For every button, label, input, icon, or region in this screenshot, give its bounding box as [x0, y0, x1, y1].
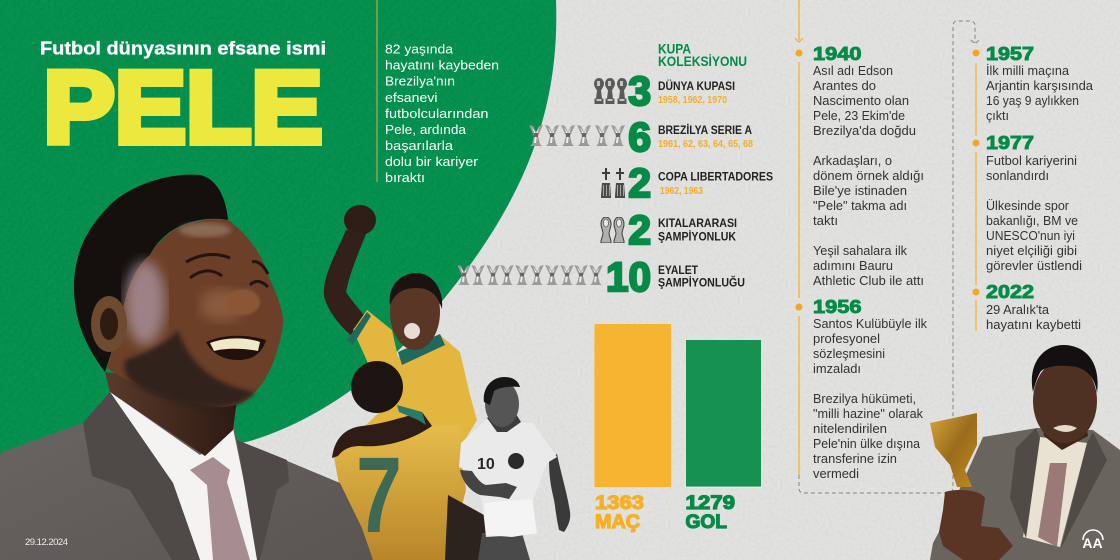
ear — [91, 296, 127, 352]
badge — [508, 453, 524, 469]
timeline entry: 1957: 16 yaş 9 aylıkken — [986, 93, 1079, 108]
upper player hair — [390, 273, 442, 309]
tie — [1038, 463, 1067, 547]
label: 1279 goals — [686, 493, 735, 533]
intro text: 82 yaşında — [385, 42, 454, 56]
jersey number: 7 — [356, 434, 402, 555]
photo: celebrating players in yellow jerseys — [324, 205, 570, 560]
shirt — [1023, 437, 1087, 547]
timeline entry: 2022: hayatını kaybetti — [986, 317, 1081, 332]
timeline connector — [795, 0, 980, 493]
lapels — [1010, 428, 1107, 548]
timeline entry: 1977: niyet elçiliği gibi — [986, 243, 1077, 258]
timeline entry: 1977: görevler üstlendi — [986, 258, 1082, 273]
upper player mouth — [404, 323, 420, 339]
timeline entry: 2022: 29 Aralık'ta — [986, 302, 1050, 317]
label: 1363 matches — [595, 493, 644, 533]
timeline entry: 1940: Athletic Club ile attı — [813, 273, 924, 288]
timeline entry: 1956: profesyonel — [813, 331, 880, 346]
timeline entry: 1940: Asıl adı Edson — [813, 63, 893, 78]
intro text: futbolcularından — [385, 106, 488, 121]
gold trophy — [930, 413, 977, 487]
lit cheek — [200, 289, 244, 321]
intro text: bıraktı — [385, 170, 425, 185]
trophy row: world cup: 1958, 1962, 1970 — [658, 95, 727, 106]
green circular panel — [0, 0, 556, 500]
icons: world cup trophies — [594, 78, 627, 104]
trophy row: serie A: BREZİLYA SERIE A — [658, 122, 752, 137]
trophy row: copa libertadores — [601, 160, 773, 206]
timeline entry: 1956: Brezilya hükümeti, — [813, 391, 916, 406]
trophy row: copa libertadores: 1962, 1963 — [660, 186, 703, 197]
intro text: başarılarla — [385, 138, 454, 153]
shirt — [459, 419, 557, 537]
timeline entry: 1940: Yeşil sahalara ilk — [813, 243, 907, 258]
forehead highlight — [179, 223, 231, 237]
date stamp: 29.12.2024 — [25, 537, 68, 548]
lower player jersey — [333, 425, 466, 560]
intro text: efsanevi — [385, 90, 438, 105]
hands — [939, 490, 1013, 560]
timeline entry: 1956: "milli hazine" olarak — [813, 406, 923, 421]
shorts — [484, 499, 537, 537]
timeline entry: 1977: UNESCO'nun iyi — [986, 228, 1075, 243]
label: 1279 goals: GOL — [686, 512, 727, 533]
face — [107, 219, 283, 407]
neck — [487, 414, 521, 432]
heading: trophy collection: KOLEKSİYONU — [658, 53, 747, 69]
timeline entry: 1956: 1956 — [813, 297, 862, 317]
trophy row: state championship — [457, 254, 745, 300]
label: 1363 matches: MAÇ — [595, 512, 640, 533]
timeline entry: 1940: adımını Bauru — [813, 258, 893, 273]
timeline entry: 1940: Nascimento olan — [813, 93, 909, 108]
timeline entry: 1940: Bile'ye istinaden — [813, 183, 907, 198]
timeline entry: 1977: Futbol kariyerini — [986, 153, 1077, 168]
timeline entry: 1977 — [986, 133, 1082, 273]
timeline entry: 1957: çıktı — [986, 108, 1009, 123]
icons: state trophies — [457, 265, 603, 285]
smile — [1053, 425, 1077, 432]
timeline entry: 1956: vermedi — [813, 466, 859, 481]
face — [1033, 359, 1097, 443]
timeline entry: 1940: taktı — [813, 213, 838, 228]
front arm — [460, 470, 517, 499]
teeth — [210, 338, 260, 351]
photo: Pele holding the trophy — [930, 345, 1120, 560]
neck and head — [1040, 410, 1088, 450]
upper player collar — [398, 334, 445, 365]
trophy row: serie A: 1961, 62, 63, 64, 65, 68 — [658, 139, 753, 150]
white shirt — [110, 392, 260, 560]
trophy row: serie A — [529, 114, 753, 160]
icons: libertadores trophies — [601, 168, 625, 198]
title: PELE: PELE — [44, 50, 322, 164]
inner ear — [100, 308, 118, 340]
sleeve cuff — [347, 312, 371, 345]
hair — [1032, 345, 1098, 393]
upper player jersey — [340, 310, 477, 450]
trophy row: world cup: 3 — [628, 68, 651, 114]
timeline entry: 1956: Pele'nin ülke dışına — [813, 436, 921, 451]
trophy row: intercontinental: 2 — [628, 207, 651, 253]
jersey number: 10 — [477, 456, 495, 473]
timeline entry: 1957: 1957 — [986, 44, 1034, 64]
raised fist — [344, 205, 376, 235]
trophy row: state championship: EYALET — [658, 263, 699, 277]
diagonal texture on green panel — [0, 0, 556, 500]
hair — [74, 175, 228, 372]
timeline entry: 1956: imzaladı — [813, 361, 861, 376]
neck — [105, 372, 238, 456]
hair — [484, 377, 520, 405]
timeline entry: 1977: 1977 — [986, 133, 1034, 153]
jaw shadow — [124, 330, 255, 408]
suit jacket — [0, 380, 373, 560]
white jersey player — [459, 377, 570, 560]
timeline entry: 1977: Ülkesinde spor — [986, 198, 1070, 213]
timeline entry: 1940: "Pele" takma adı — [813, 198, 907, 213]
intro text: Pele, ardında — [385, 122, 467, 137]
patterned tie — [190, 457, 250, 560]
timeline entry: 1957 — [986, 44, 1094, 123]
heading: trophy collection — [658, 40, 747, 69]
sleeve cuff of upper player — [397, 405, 426, 425]
AA logo: AA — [1082, 535, 1103, 551]
intro text — [385, 42, 499, 185]
nose — [226, 289, 260, 315]
timeline entry: 1977: sonlandırdı — [986, 168, 1049, 183]
subtitle: Futbol dünyasının efsane ismi — [40, 38, 326, 58]
timeline entry: 1940: dönem örnek aldığı — [813, 168, 924, 183]
timeline entry: 1940 — [813, 44, 924, 288]
timeline entry: 1940: Arkadaşları, o — [813, 153, 892, 168]
trophy row: copa libertadores: COPA LIBERTADORES — [658, 170, 773, 184]
timeline entry: 1957: Arjantin karşısında — [986, 78, 1094, 93]
timeline entry: 1940: Pele, 23 Ekim'de — [813, 108, 905, 123]
icons: intercontinental trophies — [601, 217, 624, 243]
upper player head — [390, 274, 440, 350]
hugging arm — [332, 412, 432, 458]
timeline entry: 1977: bakanlığı, BM ve — [986, 213, 1078, 228]
bar chart: matches and goals — [594, 324, 762, 533]
right lapel — [237, 440, 289, 560]
trophy row: intercontinental: KITALARARASI — [658, 216, 737, 230]
timeline entry: 1956: sözleşmesini — [813, 346, 885, 361]
raised arm — [324, 230, 368, 336]
heading: trophy collection: KUPA — [658, 40, 691, 56]
intro text: hayatını kaybeden — [385, 58, 499, 73]
trophy row: intercontinental — [601, 207, 737, 253]
cheek highlight — [125, 261, 165, 345]
timeline entry: 1956 — [813, 297, 927, 481]
timeline entry: 1940: Brezilya'da doğdu — [813, 123, 916, 138]
bar: matches — [594, 324, 671, 487]
intro text: Brezilya'nın — [385, 74, 455, 89]
timeline entry: 1940: Arantes do — [813, 78, 876, 93]
timeline entry: 1956: transferine izin — [813, 451, 897, 466]
intro text: dolu bir kariyer — [385, 154, 479, 169]
trophy row: copa libertadores: 2 — [628, 160, 651, 206]
label: 1279 goals: 1279 — [686, 493, 735, 514]
player leg and blue shorts — [445, 495, 490, 560]
photo: smiling Pele in grey suit — [0, 175, 373, 560]
left lapel shade — [83, 392, 200, 560]
trophy row: serie A: 6 — [628, 114, 651, 160]
trophy row: world cup — [594, 68, 735, 114]
head — [485, 381, 519, 427]
timeline entry: 1956: nitelendirilen — [813, 421, 887, 436]
lower player hair — [351, 361, 403, 413]
icons: serie A trophies — [529, 125, 625, 146]
timeline entry: 2022 — [986, 282, 1081, 332]
trophy row: state championship: ŞAMPİYONLUĞU — [658, 275, 745, 290]
bar: goals — [686, 340, 762, 487]
smile — [206, 336, 266, 360]
timeline entry: 1957: İlk milli maçına — [986, 63, 1070, 78]
trophy row: intercontinental: ŞAMPİYONLUK — [658, 229, 736, 244]
vertical divider line — [376, 0, 378, 182]
suit — [930, 428, 1120, 560]
eyes and brows — [186, 255, 268, 287]
trophy row: state championship: 10 — [606, 254, 651, 300]
right arm — [549, 454, 570, 532]
label: 1363 matches: 1363 — [595, 493, 644, 514]
timeline entry: 1956: Santos Kulübüyle ilk — [813, 316, 927, 331]
timeline entry: 2022: 2022 — [986, 282, 1034, 302]
trophy row: world cup: DÜNYA KUPASI — [658, 78, 735, 93]
timeline entry: 1940: 1940 — [813, 44, 862, 64]
legs — [478, 533, 530, 560]
